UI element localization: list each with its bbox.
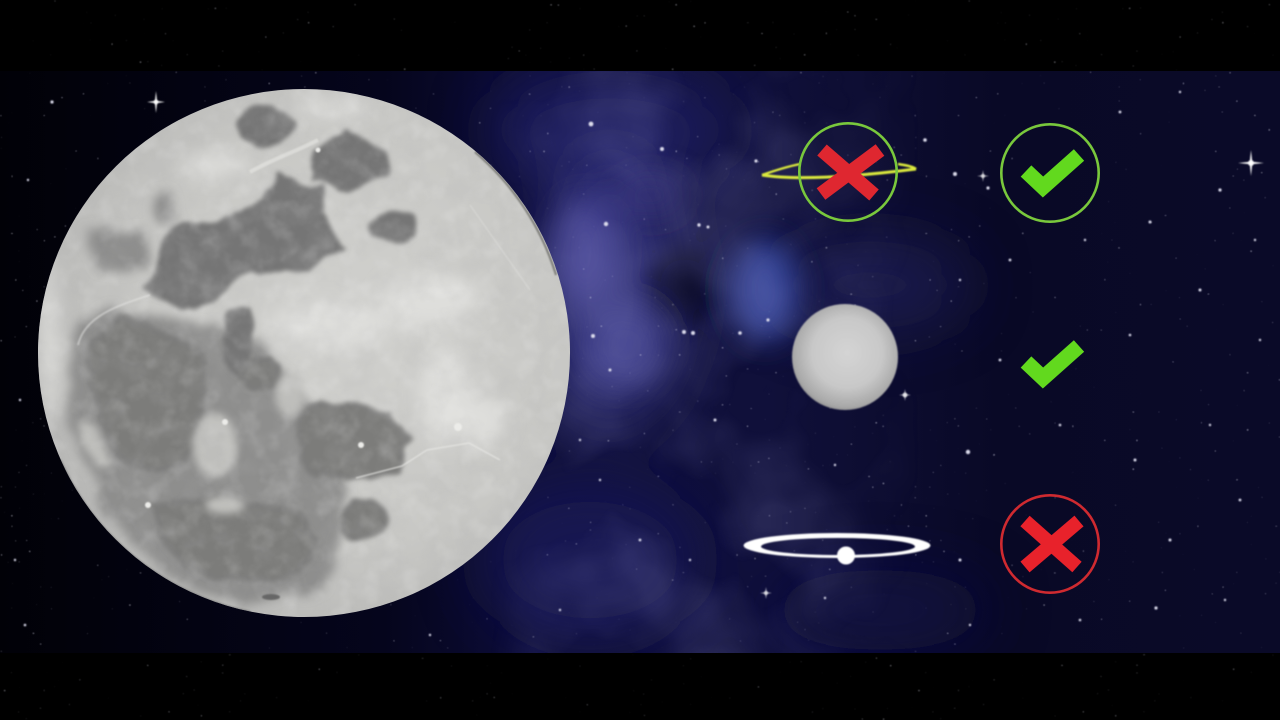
highlands: bright patches [41,100,506,446]
icon: green circle outline [799,123,897,221]
bright stars [147,91,1264,599]
maria: soft grey zones [68,194,345,606]
nebula glow [480,70,990,650]
limb shadow [475,152,556,275]
surface texture [88,114,395,516]
rays and ridges [78,140,530,478]
icon: grey sphere [792,304,898,410]
icon: red cross [821,150,880,195]
small stars [14,91,1261,636]
icon: green check in circle [1001,124,1099,222]
maria: dark patches [146,108,418,380]
craters [145,148,462,508]
moon [30,80,580,625]
icon: white orbit ring with dot [744,533,930,564]
icon: red cross in circle [1001,495,1099,593]
icon: green check [1026,346,1079,378]
item 1: ringed sphere with red cross [762,123,916,221]
icon: yellow orbit ring [762,164,916,178]
